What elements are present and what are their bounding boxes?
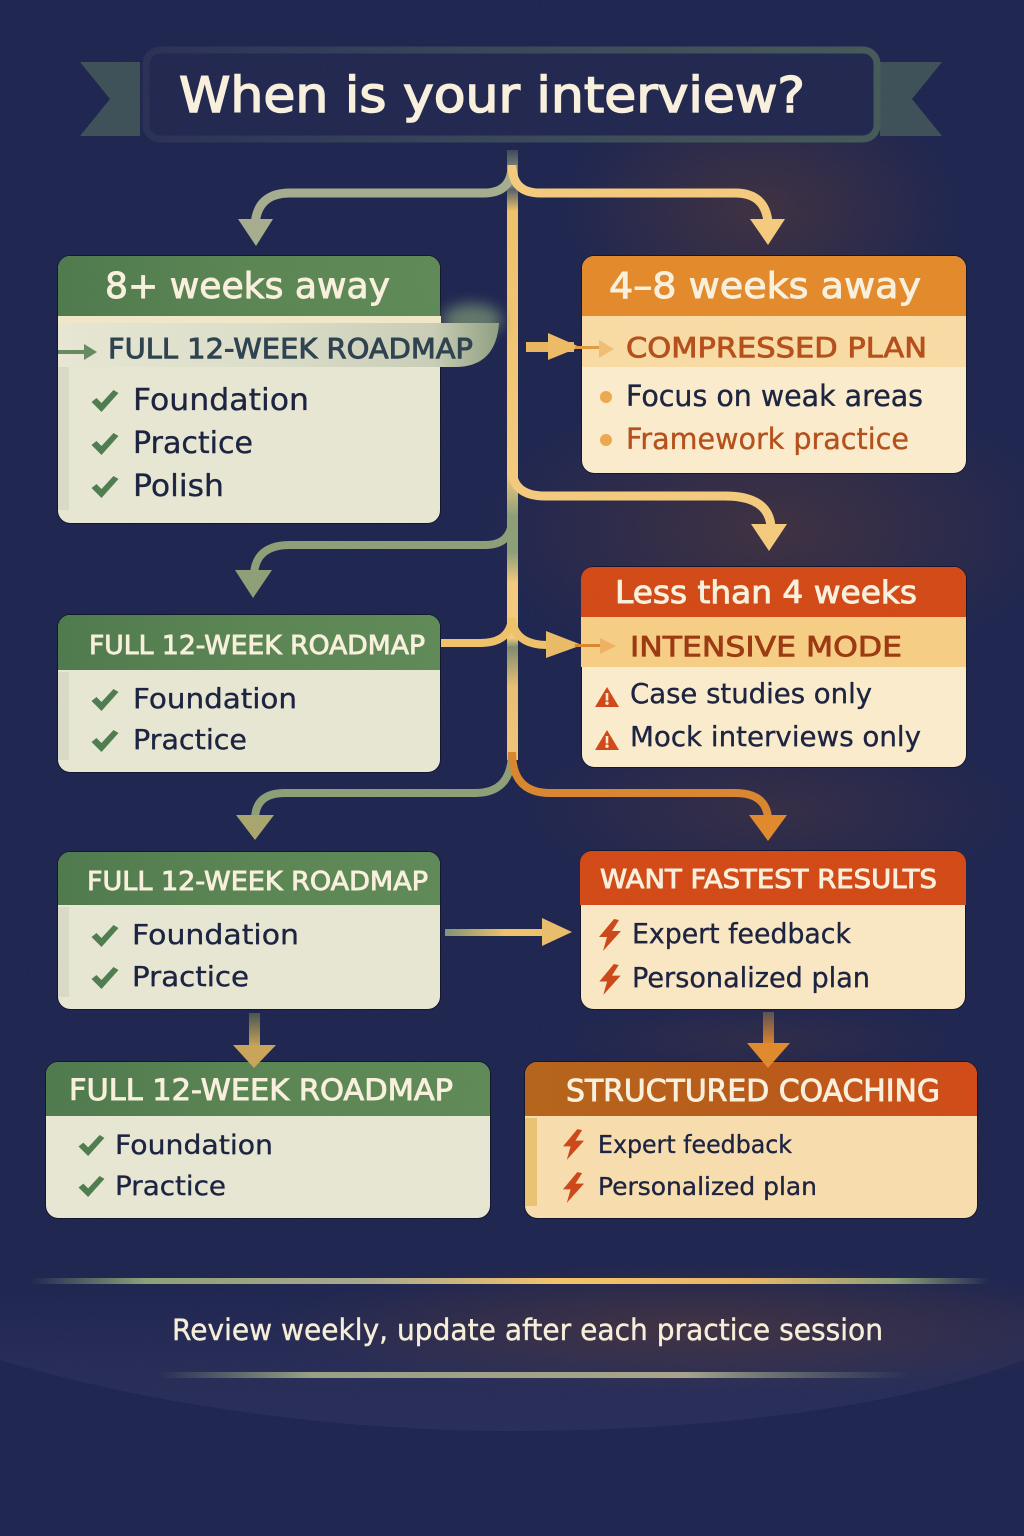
- sub heading: INTENSIVE MODE: [630, 630, 902, 663]
- arrow: roadmap to compressed plan: [526, 333, 614, 360]
- ribbon right: [880, 62, 942, 136]
- card: want fastest results: [580, 850, 966, 1010]
- footer panel backdrop: [0, 1262, 1024, 1431]
- arrow: down to roadmap 4: [233, 1013, 276, 1068]
- card: structured coaching: [524, 1062, 978, 1218]
- card: full roadmap 4: [46, 1062, 490, 1218]
- arrow: to fastest results: [512, 752, 787, 841]
- item: case studies: Case studies only: [630, 677, 872, 710]
- item: Framework practice: [626, 422, 909, 456]
- arrow: to less than 4 weeks: [512, 468, 787, 551]
- item: Polish: Polish: [133, 469, 224, 504]
- title banner: [80, 50, 942, 139]
- header: [46, 1062, 490, 1116]
- arrow: to second roadmap: [235, 522, 512, 598]
- item: personalized plan: Personalized plan: [598, 1172, 817, 1201]
- footer text: Review weekly, update after each practice session: [172, 1313, 883, 1347]
- heading: WANT FASTEST RESULTS: [600, 865, 937, 895]
- header: [580, 851, 966, 905]
- heading: FULL 12-WEEK ROADMAP: [69, 1073, 453, 1107]
- footer note: [30, 1278, 990, 1378]
- ribbon left: [80, 62, 140, 136]
- heading: FULL 12-WEEK ROADMAP: [87, 867, 428, 897]
- header: [582, 256, 966, 316]
- title: When is your interview?: [179, 67, 805, 124]
- item: Foundation: Foundation: [115, 1130, 273, 1161]
- card: 8+ weeks away: [58, 256, 502, 524]
- item: Practice: Practice: [115, 1171, 226, 1202]
- arrow: to third roadmap: [236, 752, 512, 840]
- title frame: [146, 50, 877, 139]
- item: Practice: Practice: [132, 960, 249, 993]
- item: Focus on weak areas: [626, 379, 923, 413]
- heading: FULL 12-WEEK ROADMAP: [89, 631, 425, 661]
- item: Foundation: Foundation: [133, 682, 297, 715]
- header: [58, 615, 440, 670]
- item: Practice: Practice: [133, 426, 253, 461]
- arrow: roadmap to fastest results: [445, 918, 572, 946]
- header: [525, 1062, 977, 1116]
- bullet: [600, 434, 612, 446]
- sub banner: [58, 323, 499, 367]
- arrow: split to intensive mode: [441, 618, 582, 658]
- band: [581, 617, 966, 667]
- item: Practice: Practice: [133, 723, 247, 756]
- card: 4-8 weeks away: [582, 256, 966, 474]
- heading: 8+ weeks away: [105, 266, 390, 307]
- header: [58, 256, 440, 316]
- flow trunk: [507, 150, 518, 760]
- item: mock interviews: Mock interviews only: [630, 720, 921, 753]
- item: Polish: [92, 469, 224, 504]
- small arrow: [58, 344, 97, 360]
- sub heading: FULL 12-WEEK ROADMAP: [108, 332, 473, 365]
- sub heading: COMPRESSED PLAN: [626, 331, 927, 364]
- item: expert feedback: Expert feedback: [632, 917, 852, 950]
- card: full roadmap 3: [58, 852, 440, 1010]
- item: Foundation: Foundation: [133, 383, 309, 418]
- header: [58, 852, 440, 905]
- header: [581, 567, 966, 617]
- card: full roadmap 2: [58, 614, 440, 772]
- item: expert feedback: Expert feedback: [598, 1130, 792, 1159]
- heading: Less than 4 weeks: [615, 575, 917, 611]
- bullet: [600, 391, 612, 403]
- arrow: down to structured coaching: [747, 1012, 790, 1068]
- arrow: to 8+ weeks: [238, 165, 512, 246]
- arrow: to 4-8 weeks: [512, 165, 785, 245]
- band: [582, 316, 966, 367]
- heading: STRUCTURED COACHING: [566, 1074, 940, 1109]
- item: Foundation: Foundation: [132, 918, 299, 951]
- smudge: [442, 304, 502, 336]
- item: personalized plan: Personalized plan: [632, 961, 870, 994]
- small arrow: [575, 638, 616, 654]
- card: less than 4 weeks: [575, 566, 966, 768]
- heading: 4–8 weeks away: [609, 266, 921, 307]
